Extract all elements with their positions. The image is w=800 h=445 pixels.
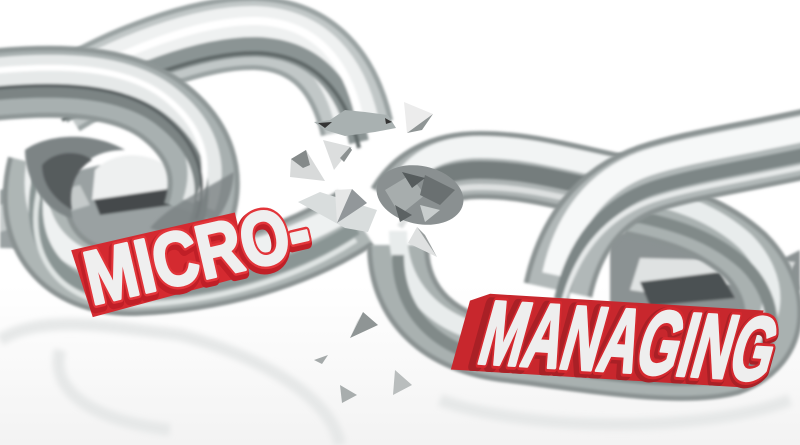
shard E [408, 227, 437, 257]
dark reflection in ring [25, 137, 234, 242]
broken end surface [371, 157, 469, 233]
shard D [335, 189, 367, 223]
chain link: front ring lower [36, 151, 356, 305]
broken end upper [314, 110, 396, 136]
back shadow pieces in the left ring hole [0, 155, 200, 250]
left chain [0, 21, 396, 305]
shards [290, 102, 437, 403]
broken end lower [298, 192, 377, 232]
label: MICRO-: MICRO- [77, 187, 318, 322]
label: MICRO-: MICRO- [77, 187, 318, 322]
chain link: upper back arc [60, 21, 359, 148]
chain link: upper right link [400, 147, 630, 227]
shard B [323, 140, 352, 170]
hole back pieces [610, 222, 800, 315]
right chain [371, 128, 800, 380]
lower shards [314, 312, 412, 403]
chain link: front right link [555, 128, 800, 312]
chain link: front ring top [0, 68, 205, 224]
shard A [404, 102, 433, 133]
floor reflection [0, 324, 790, 445]
chain link: lower right link [398, 191, 771, 380]
shard C [290, 150, 325, 181]
label: MICRO-: MICRO- [75, 191, 317, 325]
